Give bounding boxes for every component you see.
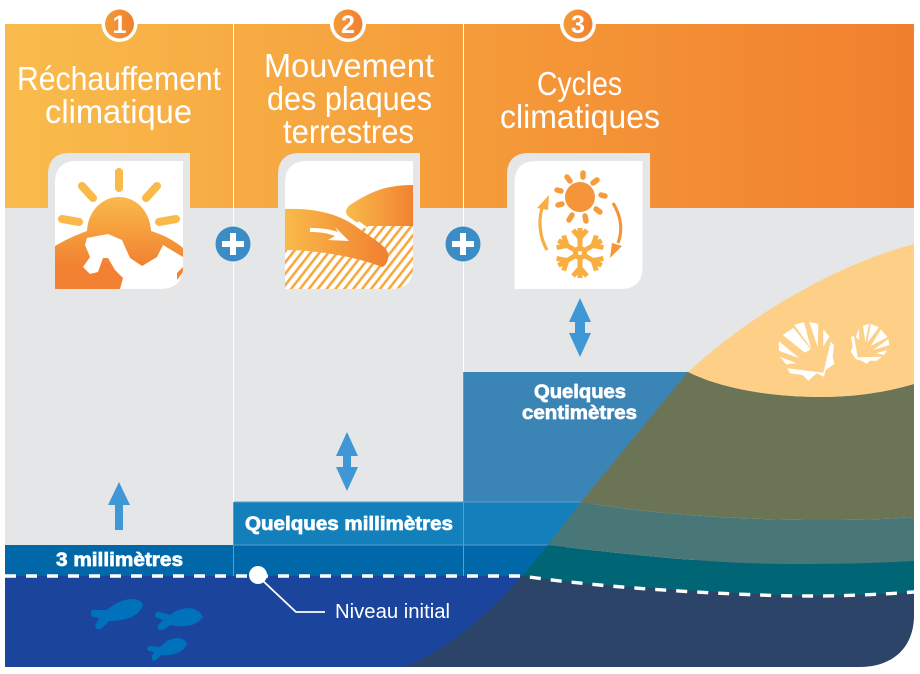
icon: fish 2 bbox=[155, 608, 203, 630]
terrain: dark bedrock bbox=[403, 560, 914, 667]
icon 2: tectonic plates bbox=[278, 153, 420, 289]
label: Quelques centimètres bbox=[522, 382, 637, 424]
terrain cross-section bbox=[403, 244, 914, 667]
terrain: grey-teal layer bbox=[548, 502, 914, 564]
heading: Réchauffement climatique: climatique bbox=[45, 93, 192, 130]
terrain: olive layer bbox=[581, 372, 914, 520]
heading: Cycles climatiques: climatiques bbox=[500, 98, 660, 135]
arrow: double vertical column 2 bbox=[336, 432, 358, 491]
label: 3 millimètres: 3 millimètres bbox=[56, 550, 183, 571]
heading: Cycles climatiques bbox=[500, 65, 660, 135]
callout: initial level bbox=[249, 566, 450, 623]
plus sign 1 bbox=[216, 226, 250, 262]
heading: Mouvement des plaques terrestres: Mouvement bbox=[264, 47, 434, 84]
label: Quelques centimètres: Quelques bbox=[534, 382, 626, 403]
icon: small shell bbox=[851, 324, 889, 364]
number badge 1 bbox=[102, 6, 138, 42]
icon 1: warming sun over earth bbox=[48, 153, 190, 289]
number badge 2 bbox=[330, 6, 366, 42]
column divider lines bbox=[234, 24, 464, 576]
heading: Réchauffement climatique: Réchauffement bbox=[17, 60, 221, 97]
heading: Réchauffement climatique bbox=[17, 60, 221, 130]
arrow: double vertical column 3 bbox=[569, 298, 591, 357]
number badge 1: 1 bbox=[113, 11, 127, 39]
number badge 2: 2 bbox=[341, 11, 355, 39]
label: Quelques centimètres: centimètres bbox=[522, 403, 637, 424]
icon: fish 1 bbox=[91, 599, 143, 629]
terrain: teal layer bbox=[522, 545, 914, 596]
icon: large shell bbox=[779, 322, 834, 381]
icon: fish 3 bbox=[147, 638, 187, 661]
orange header band bbox=[5, 24, 914, 208]
plus sign 2 bbox=[446, 226, 480, 262]
heading: Cycles climatiques: Cycles bbox=[537, 65, 622, 102]
heading: Mouvement des plaques terrestres bbox=[264, 47, 434, 150]
callout: initial level: Niveau initial bbox=[335, 601, 450, 623]
number badge 3 bbox=[560, 6, 596, 42]
water: sea level rise blocks bbox=[5, 372, 703, 667]
number badge 3: 3 bbox=[571, 11, 585, 39]
initial level dashed line bbox=[5, 576, 914, 596]
cycle arrows bbox=[537, 195, 622, 258]
arrow: up bbox=[108, 482, 130, 530]
terrain: sand layer bbox=[688, 244, 914, 397]
label: Quelques millimètres: Quelques millimètres bbox=[245, 514, 453, 535]
snowflake bbox=[555, 228, 605, 278]
icon 3: climate cycles bbox=[507, 153, 650, 289]
sun bbox=[557, 173, 605, 221]
heading: Mouvement des plaques terrestres: des plaques bbox=[267, 80, 432, 117]
heading: Mouvement des plaques terrestres: terrestres bbox=[283, 113, 414, 150]
